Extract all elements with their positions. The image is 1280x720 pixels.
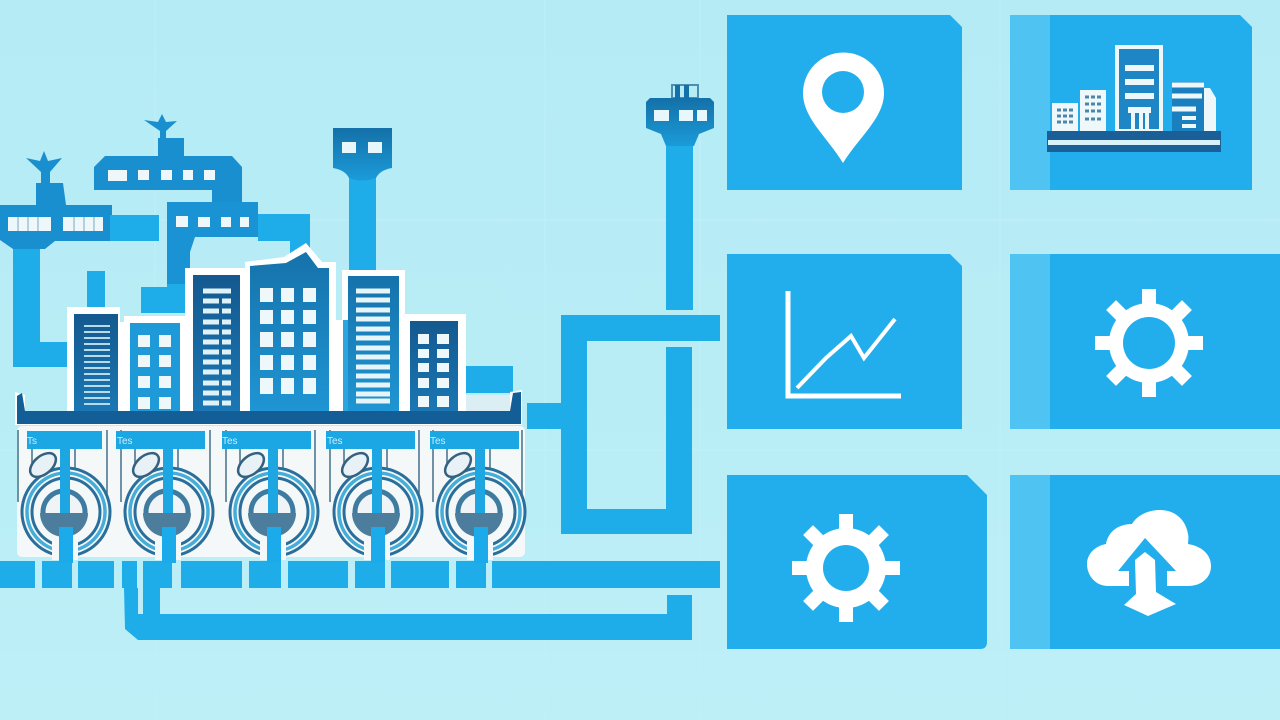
icon: city skyline bbox=[1047, 47, 1221, 152]
pump unit 2 bbox=[116, 430, 213, 563]
pump unit 3 bbox=[222, 430, 318, 563]
panel: location bbox=[727, 15, 962, 190]
lower return pipe bbox=[124, 588, 692, 640]
pump unit 5 bbox=[430, 430, 525, 563]
pump unit 3: Tes bbox=[222, 436, 238, 447]
pump unit 1: Ts bbox=[27, 436, 37, 447]
pump unit 4 bbox=[326, 430, 422, 563]
icon: location pin bbox=[803, 53, 884, 163]
pump unit 1 bbox=[18, 430, 110, 563]
tower upper with pipes bbox=[94, 114, 310, 313]
icon: gear bbox=[1102, 296, 1196, 390]
pipe network bbox=[0, 140, 720, 640]
building 4 bbox=[250, 252, 329, 411]
building 2 bbox=[130, 323, 180, 411]
tower pipe bbox=[666, 140, 693, 310]
building 6 bbox=[410, 321, 458, 411]
pump unit 4: Tes bbox=[327, 436, 343, 447]
tower centre bbox=[333, 128, 392, 270]
panel: city bbox=[1010, 15, 1252, 190]
pump unit 5: Tes bbox=[430, 436, 446, 447]
building 3 bbox=[193, 275, 240, 411]
icon: line chart bbox=[788, 291, 901, 396]
building 5 bbox=[343, 276, 399, 411]
panel: settings lower bbox=[727, 475, 987, 649]
city skyline bbox=[15, 243, 522, 425]
pump units bbox=[17, 426, 525, 563]
base platform bbox=[17, 392, 521, 424]
bottom pipe row bbox=[0, 561, 720, 588]
icon: cloud upload bbox=[1087, 510, 1211, 616]
building 1 bbox=[74, 314, 118, 411]
tower right bbox=[646, 85, 714, 146]
pump unit 2: Tes bbox=[117, 436, 133, 447]
panel: settings upper bbox=[1010, 254, 1280, 429]
tower left with pipes bbox=[0, 151, 159, 367]
panel: cloud upload bbox=[1010, 475, 1280, 649]
panel: chart bbox=[727, 254, 962, 429]
icon: gear bbox=[799, 521, 893, 615]
